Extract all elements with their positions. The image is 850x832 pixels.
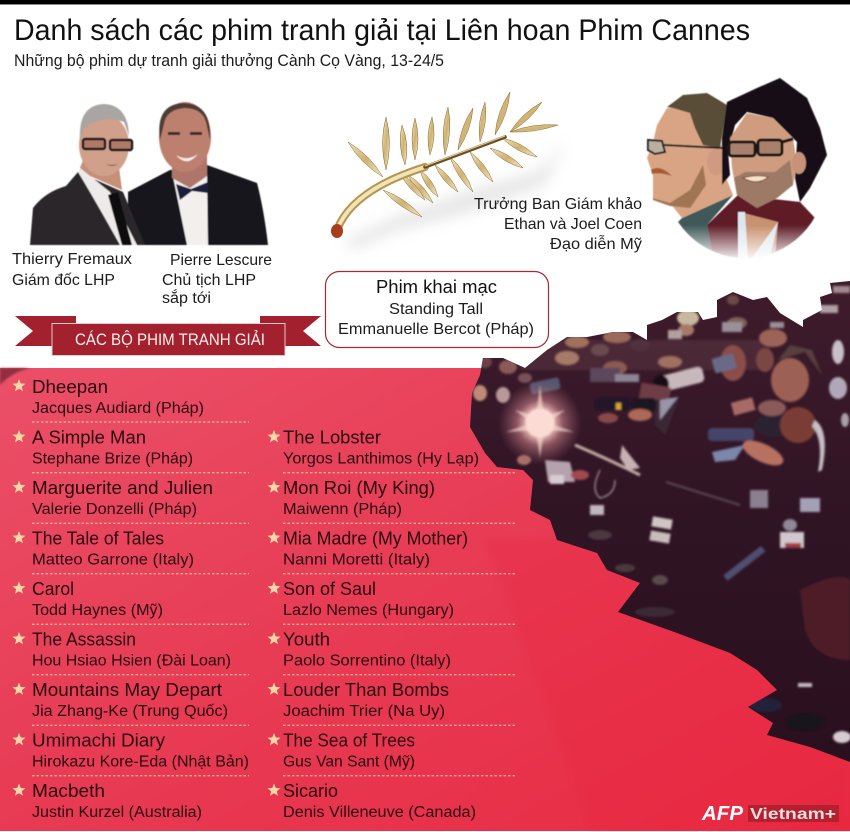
film: Son of Saul: Son of Saul [283,578,376,599]
film: Macbeth: Macbeth [32,780,105,801]
photo: Coen brothers [647,78,827,260]
caption: Thierry Fremaux: Giám đốc LHP [12,272,115,289]
callout: opening film: Standing Tall [389,301,483,318]
film: The Tale of Tales [13,528,249,574]
film: Dheepan: Dheepan [32,376,108,397]
film: Carol: Todd Haynes (Mỹ) [32,602,163,619]
caption: jury presidents: Ethan và Joel Coen [504,216,642,233]
film: The Sea of Trees [268,730,515,776]
caption: jury presidents: Trưởng Ban Giám khảo [474,196,642,213]
film: Mountains May Depart: Jia Zhang-Ke (Trung Quốc) [32,703,228,720]
title: Danh sách các phim tranh giải tại Liên hoan Phim Cannes [14,14,750,47]
film: Dheepan [13,376,249,422]
film: Son of Saul: Lazlo Nemes (Hungary) [283,602,454,619]
camera flash [498,381,582,465]
film: The Lobster: Yorgos Lanthimos (Hy Lạp) [283,450,479,468]
top bar [0,0,850,5]
film: The Assassin: Hou Hsiao Hsien (Đài Loan) [32,652,231,670]
film: Youth: Youth [283,628,330,650]
caption: Thierry Fremaux [12,251,132,289]
film: Macbeth [13,780,202,821]
film: Mia Madre: Mia Madre (My Mother) [283,528,468,548]
caption: Pierre Lescure: Chủ tịch LHP [162,272,256,289]
film: Youth: Paolo Sorrentino (Italy) [283,652,451,670]
icon: golden palm [331,92,565,250]
film: Mon Roi: Mon Roi (My King) [283,477,435,498]
film: The Assassin: The Assassin [32,628,136,650]
film: Umimachi Diary: Hirokazu Kore-Eda (Nhật Bản) [32,754,249,770]
caption: Pierre Lescure: Pierre Lescure [170,252,272,269]
film: Dheepan: Jacques Audiard (Pháp) [32,400,204,417]
film: Youth [268,628,515,675]
photo: festival directors [30,102,268,245]
film: Marguerite and Julien: Marguerite and Julien [32,477,213,498]
film: A Simple Man: A Simple Man [32,426,146,448]
callout: opening film [326,272,548,348]
film: The Sea of Trees: Gus Van Sant (Mỹ) [283,754,415,770]
film: Louder Than Bombs: Joachim Trier (Na Uy) [283,703,445,720]
film: Umimachi Diary: Umimachi Diary [32,730,166,750]
film: Mia Madre [268,528,515,574]
film: Mon Roi: Maiwenn (Pháp) [283,501,402,518]
film: The Lobster: The Lobster [283,426,381,448]
section banner ribbon [15,316,321,356]
film: Mon Roi [268,477,515,523]
film: The Assassin [13,628,249,675]
film: The Lobster [268,426,515,473]
film list column 2 [268,426,515,821]
section banner ribbon: CÁC BỘ PHIM TRANH GIẢI [75,330,265,349]
film: Louder Than Bombs: Louder Than Bombs [283,679,449,700]
panel: red carpet [0,368,850,831]
callout: opening film: Emmanuelle Bercot (Pháp) [338,321,534,338]
caption: Pierre Lescure [162,252,272,307]
caption: Pierre Lescure: sắp tới [162,288,211,307]
film: The Tale of Tales: The Tale of Tales [32,528,164,548]
film: The Tale of Tales: Matteo Garrone (Italy) [32,552,194,568]
logo: AFP and Vietnam+: Vietnam+ [750,806,836,823]
film list column 1 [13,376,249,821]
film: Mountains May Depart [13,679,249,725]
film: Son of Saul [268,578,515,624]
film: Macbeth: Justin Kurzel (Australia) [32,804,202,821]
film: Sicario: Denis Villeneuve (Canada) [283,804,476,821]
caption: Thierry Fremaux: Thierry Fremaux [12,251,132,268]
film: Mountains May Depart: Mountains May Depart [32,679,222,700]
film: Louder Than Bombs [268,679,515,725]
crowd of photographers [465,278,850,768]
film: A Simple Man: Stephane Brize (Pháp) [32,450,193,468]
film: Umimachi Diary [13,730,249,776]
film: The Sea of Trees: The Sea of Trees [283,730,415,750]
film: A Simple Man [13,426,249,473]
film: Sicario: Sicario [283,780,338,801]
subtitle: Những bộ phim dự tranh giải thưởng Cành Cọ Vàng, 13-24/5 [14,51,444,70]
film: Sicario [268,780,476,821]
callout: opening film: Phim khai mạc [376,277,497,297]
logo: AFP and Vietnam+ [701,803,839,825]
caption: jury presidents [474,196,642,253]
film: Mia Madre: Nanni Moretti (Italy) [283,552,430,568]
film: Marguerite and Julien: Valerie Donzelli (Pháp) [32,501,197,518]
logo: AFP and Vietnam+: AFP [701,803,744,825]
film: Carol [13,578,249,624]
caption: jury presidents: Đạo diễn Mỹ [550,234,642,253]
film: Carol: Carol [32,578,74,599]
film: Marguerite and Julien [13,477,249,523]
